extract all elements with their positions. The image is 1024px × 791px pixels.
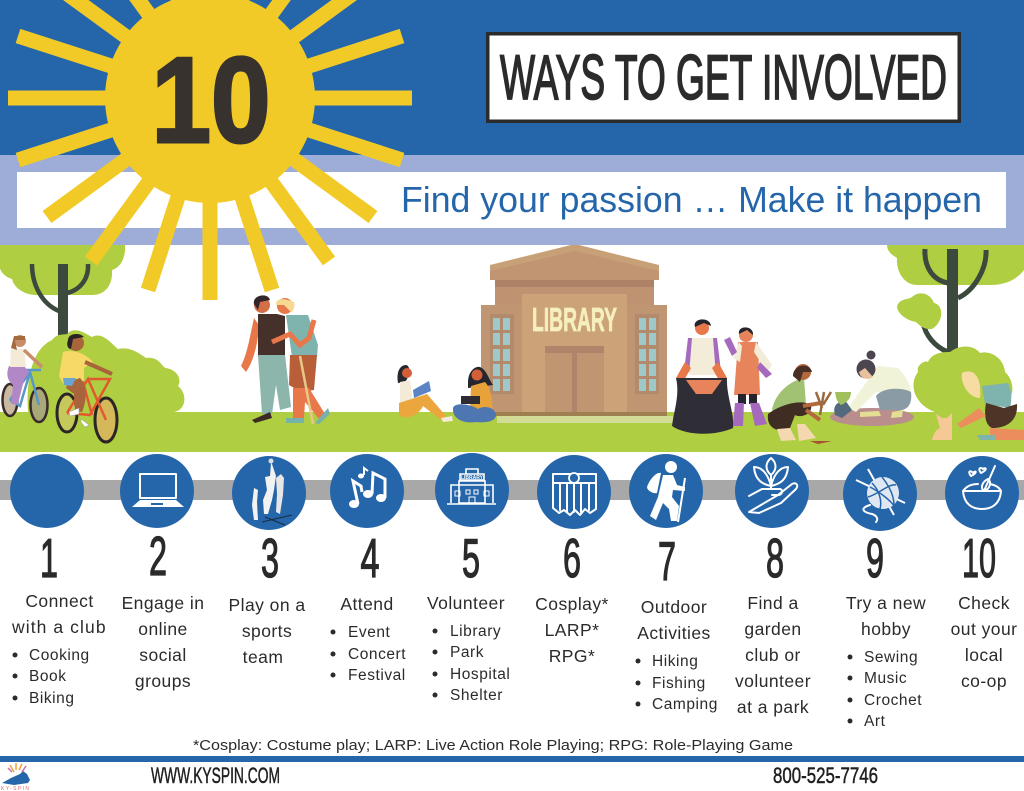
step 9 text: Try a new xyxy=(846,593,926,613)
step 3 icon: basketball players xyxy=(232,456,306,530)
step 9 text: Sewing xyxy=(864,649,918,666)
step 4 text xyxy=(330,594,406,684)
step 9 icon: yarn and needles xyxy=(843,457,917,531)
step 10 text xyxy=(951,593,1017,691)
step 3 text: team xyxy=(243,647,283,667)
step 2 text xyxy=(122,593,204,691)
step 10 text: local xyxy=(965,645,1003,665)
illustration: library building xyxy=(481,244,673,423)
step 8 text: at a park xyxy=(737,697,809,717)
step numbers: 9 xyxy=(866,527,884,589)
footer phone: 800-525-7746 xyxy=(773,763,878,788)
header: blue band xyxy=(0,0,1024,155)
step 4 text: Concert xyxy=(348,646,406,663)
footer divider xyxy=(0,756,1024,762)
step 4 icon: music notes xyxy=(330,454,404,528)
step 9 text: hobby xyxy=(861,619,911,639)
illustration: person on red bike xyxy=(57,334,117,442)
step 8 icon: hand with plant xyxy=(735,454,809,528)
step numbers: 6 xyxy=(563,527,581,589)
step numbers: 2 xyxy=(149,525,167,587)
step 3 text xyxy=(228,595,306,667)
step 2 icon: laptop xyxy=(120,454,194,528)
step numbers: 5 xyxy=(462,527,480,589)
step 6 text: LARP* xyxy=(545,620,599,640)
illustration: gardener planting seedling xyxy=(830,350,914,426)
step 1 text: Book xyxy=(29,668,67,685)
step 7 text: Activities xyxy=(637,623,711,643)
step 2 text: online xyxy=(138,619,188,639)
header: lavender band xyxy=(0,155,1024,245)
step numbers: 10 xyxy=(962,527,996,589)
step 3 text: sports xyxy=(242,621,292,641)
illustration: left tree xyxy=(0,245,125,336)
step 5 icon: library school xyxy=(435,453,509,527)
step 9 text: Art xyxy=(864,713,886,730)
step numbers: 4 xyxy=(360,527,380,589)
step 7 icon: hiker xyxy=(629,454,703,528)
illustration: two people walking with cane xyxy=(241,295,330,424)
step 6 icon: banner xyxy=(537,455,611,529)
step 1 icon circle xyxy=(10,454,84,528)
scene: park ground xyxy=(0,412,1024,452)
illustration: right bush xyxy=(913,346,1012,412)
step 1 text: Cooking xyxy=(29,647,90,664)
step 8 text: club or xyxy=(745,645,801,665)
step 2 text: groups xyxy=(135,671,191,691)
step 8 text: garden xyxy=(744,619,802,639)
step 6 text: Cosplay* xyxy=(535,594,609,614)
step 5 text: Shelter xyxy=(450,687,503,704)
step numbers: 3 xyxy=(261,527,279,589)
step 7 text: Hiking xyxy=(652,653,698,670)
step 10 text: out your xyxy=(951,619,1017,639)
step 7 text xyxy=(636,597,718,713)
step 4 text: Festival xyxy=(348,667,406,684)
step 1 text: Connect xyxy=(25,591,94,611)
illustration: woman on blue bike xyxy=(2,335,48,422)
step numbers: 8 xyxy=(766,527,784,589)
sun with number 10: 10 xyxy=(152,32,270,168)
illustration: left bush xyxy=(28,330,184,412)
step 7 text: Camping xyxy=(652,696,718,713)
step 7 text: Fishing xyxy=(652,675,706,692)
illustration: right tree xyxy=(887,245,1024,352)
step 10 icon: mixing bowl xyxy=(945,456,1019,530)
step 5 text: Library xyxy=(450,623,501,640)
step 3 text: Play on a xyxy=(228,595,306,615)
illustration: library building: LIBRARY xyxy=(532,301,617,338)
step 5 text xyxy=(427,593,510,704)
step 2 text: Engage in xyxy=(122,593,204,613)
step 1 text xyxy=(11,591,106,707)
timeline bar xyxy=(0,480,1024,500)
step 4 text: Event xyxy=(348,624,391,641)
subtitle box xyxy=(17,172,1006,228)
sun with number 10 xyxy=(8,0,412,300)
footnote: *Cosplay: Costume play; LARP: Live Action Role Playing; RPG: Role-Playing Game xyxy=(193,738,793,754)
footer logo xyxy=(1,763,30,791)
step 8 text: volunteer xyxy=(735,671,811,691)
step 7 text: Outdoor xyxy=(641,597,707,617)
step numbers: 1 xyxy=(40,527,58,589)
step 2 text: social xyxy=(139,645,187,665)
illustration: volunteers with trash bag xyxy=(672,319,772,434)
step 8 text: Find a xyxy=(747,593,799,613)
subtitle box: Find your passion … Make it happen xyxy=(401,179,982,220)
step 5 icon: library school: LIBRARY xyxy=(461,475,484,481)
step 5 text: Volunteer xyxy=(427,593,505,613)
illustration: person with cat xyxy=(932,371,1024,440)
step 9 text xyxy=(846,593,926,730)
step 10 text: Check xyxy=(958,593,1010,613)
illustration: gardener kneeling with plant xyxy=(768,364,832,444)
step 4 text: Attend xyxy=(340,594,394,614)
step 1 text: with a club xyxy=(11,617,106,637)
step 6 text: RPG* xyxy=(549,646,595,666)
step 5 text: Hospital xyxy=(450,666,510,683)
step numbers: 7 xyxy=(658,530,676,592)
step 9 text: Crochet xyxy=(864,692,922,709)
step numbers xyxy=(40,525,996,592)
step 6 text xyxy=(535,594,609,666)
step 8 text xyxy=(735,593,811,717)
illustration: two people reading xyxy=(397,365,496,422)
step 1 text: Biking xyxy=(29,690,75,707)
step 5 text: Park xyxy=(450,644,484,661)
step 10 text: co-op xyxy=(961,671,1007,691)
step 9 text: Music xyxy=(864,670,907,687)
footer website: WWW.KYSPIN.COM xyxy=(151,763,280,788)
